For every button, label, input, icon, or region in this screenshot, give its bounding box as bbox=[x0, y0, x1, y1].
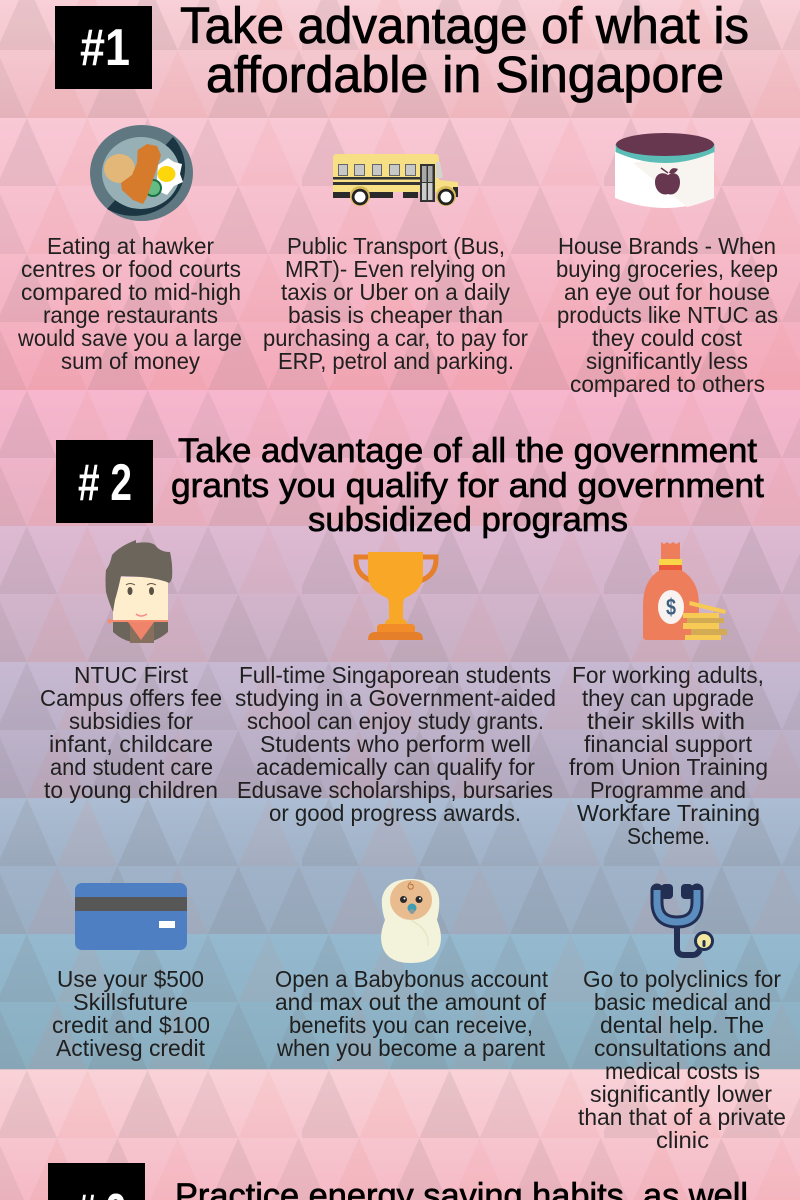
text: study grants bbox=[235, 662, 556, 826]
badge: #1: #1 bbox=[80, 19, 130, 77]
text: study grants: Students who perform well bbox=[260, 731, 531, 757]
text: skillsfuture credit: credit and $100 bbox=[52, 1012, 210, 1038]
text: polyclinics: clinic bbox=[656, 1127, 709, 1153]
heading: section 2: Take advantage of all the government bbox=[178, 432, 758, 470]
text: NTUC First Campus: to young children bbox=[44, 777, 218, 803]
icon: house brand can bbox=[615, 133, 714, 208]
text: hawker centres: centres or food courts bbox=[21, 256, 241, 282]
icon: baby bbox=[381, 879, 441, 963]
text: working adults: financial support bbox=[584, 731, 753, 757]
text: NTUC First Campus: and student care bbox=[50, 754, 213, 780]
text: polyclinics: than that of a private bbox=[578, 1104, 786, 1130]
text: hawker centres: Eating at hawker bbox=[47, 233, 214, 259]
text: babybonus: benefits you can receive, bbox=[289, 1012, 533, 1038]
text: polyclinics: consultations and bbox=[594, 1035, 771, 1061]
text: study grants: academically can qualify for bbox=[256, 754, 535, 780]
badge: #2: # 2 bbox=[78, 454, 132, 512]
text: house brands: an eye out for house bbox=[564, 279, 770, 305]
icon: credit card bbox=[75, 883, 187, 950]
text: NTUC First Campus bbox=[40, 662, 222, 803]
text: house brands: they could cost bbox=[592, 325, 743, 351]
text: skillsfuture credit: Activesg credit bbox=[56, 1035, 206, 1061]
heading: section 2: subsidized programs bbox=[308, 501, 628, 539]
title: section 1: affordable in Singapore bbox=[206, 46, 724, 103]
text: hawker centres: compared to mid-high bbox=[21, 279, 241, 305]
text: skillsfuture credit bbox=[52, 966, 210, 1061]
text: study grants: school can enjoy study grants. bbox=[247, 708, 544, 734]
text: working adults: Scheme. bbox=[627, 823, 710, 849]
icon: child face bbox=[106, 540, 172, 643]
badge: #3 bbox=[48, 1163, 145, 1200]
text: polyclinics: medical costs is bbox=[605, 1058, 760, 1084]
text: NTUC First Campus: infant, childcare bbox=[49, 731, 213, 757]
text: public transport: basis is cheaper than bbox=[288, 302, 503, 328]
icon: trophy bbox=[356, 552, 436, 640]
icon: money bag bbox=[643, 542, 727, 640]
text: working adults: they can upgrade bbox=[582, 685, 754, 711]
heading: section 2: grants you qualify for and government bbox=[171, 467, 765, 505]
text: study grants: studying in a Government-aided bbox=[235, 685, 556, 711]
text: skillsfuture credit: Skillsfuture bbox=[73, 989, 188, 1015]
text: skillsfuture credit: Use your $500 bbox=[57, 966, 204, 992]
badge: #2 bbox=[56, 440, 153, 523]
text: babybonus: and max out the amount of bbox=[275, 989, 547, 1015]
text: house brands: compared to others bbox=[570, 371, 765, 397]
text: study grants: Full-time Singaporean students bbox=[239, 662, 551, 688]
icon: school bus bbox=[333, 154, 458, 206]
text: public transport: purchasing a car, to pay for bbox=[263, 325, 528, 351]
text: house brands bbox=[556, 233, 778, 397]
title: section 1 bbox=[180, 0, 749, 103]
text: working adults: Programme and bbox=[590, 777, 746, 803]
text: hawker centres: range restaurants bbox=[43, 302, 218, 328]
text: babybonus bbox=[275, 966, 549, 1061]
text: working adults bbox=[569, 662, 768, 849]
text: NTUC First Campus: subsidies for bbox=[69, 708, 193, 734]
icon: plate of food bbox=[90, 125, 193, 221]
text: public transport bbox=[263, 233, 528, 374]
text: public transport: taxis or Uber on a daily bbox=[281, 279, 510, 305]
text: polyclinics bbox=[578, 966, 786, 1153]
text: polyclinics: Go to polyclinics for bbox=[583, 966, 781, 992]
text: working adults: from Union Training bbox=[569, 754, 768, 780]
text: study grants: Edusave scholarships, bursaries bbox=[237, 777, 553, 803]
text: house brands: significantly less bbox=[586, 348, 748, 374]
badge: #1 bbox=[55, 6, 152, 89]
text: public transport: Public Transport (Bus, bbox=[287, 233, 505, 259]
icon: money bag: $ bbox=[666, 594, 676, 620]
text: house brands: House Brands - When bbox=[558, 233, 776, 259]
text: working adults: For working adults, bbox=[572, 662, 764, 688]
text: public transport: MRT)- Even relying on bbox=[285, 256, 506, 282]
text: hawker centres bbox=[17, 233, 242, 374]
icon: stethoscope bbox=[657, 884, 714, 955]
text: babybonus: Open a Babybonus account bbox=[275, 966, 549, 992]
text: NTUC First Campus: Campus offers fee bbox=[40, 685, 222, 711]
text: public transport: ERP, petrol and parking. bbox=[278, 348, 514, 374]
text: hawker centres: sum of money bbox=[61, 348, 200, 374]
text: polyclinics: dental help. The bbox=[600, 1012, 764, 1038]
text: study grants: or good progress awards. bbox=[269, 800, 521, 826]
text: babybonus: when you become a parent bbox=[276, 1035, 546, 1061]
text: hawker centres: would save you a large bbox=[17, 325, 242, 351]
text: house brands: buying groceries, keep bbox=[556, 256, 778, 282]
text: house brands: products like NTUC as bbox=[557, 302, 778, 328]
text: working adults: their skills with bbox=[587, 708, 745, 734]
text: NTUC First Campus: NTUC First bbox=[74, 662, 189, 688]
text: working adults: Workfare Training bbox=[577, 800, 760, 826]
heading: section 2 bbox=[171, 432, 765, 539]
text: polyclinics: basic medical and bbox=[594, 989, 771, 1015]
text: polyclinics: significantly lower bbox=[590, 1081, 772, 1107]
